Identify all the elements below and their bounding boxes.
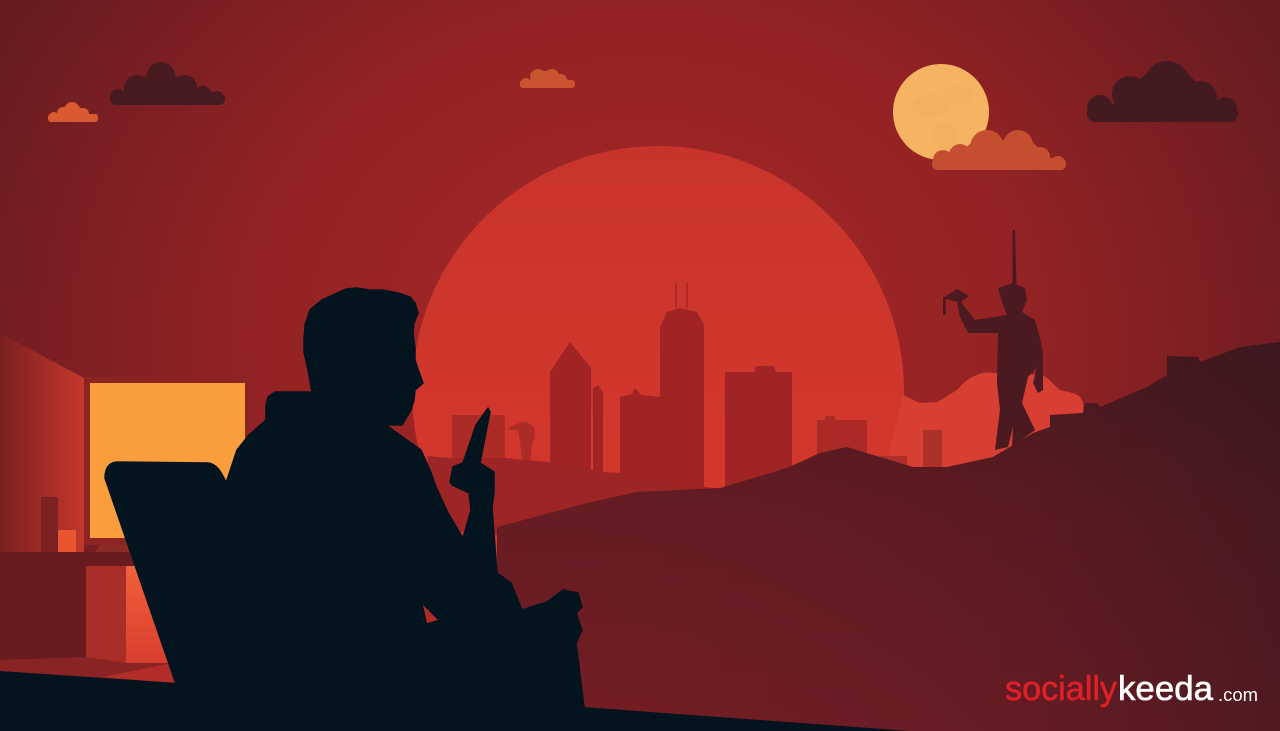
room: left wall: [0, 333, 250, 684]
pointed tower: [550, 342, 591, 480]
low block: [817, 416, 867, 460]
standing figure with cap: [943, 230, 1043, 450]
foreground hills: [497, 342, 1280, 731]
monitor frame: [84, 377, 250, 545]
skyscraper antennas: [676, 283, 687, 308]
dark cloud top left: [110, 62, 225, 105]
orange cloud top centre: [520, 69, 575, 88]
dark cloud top right: [1087, 61, 1238, 122]
mast above figure: [1012, 230, 1016, 285]
logo suffix: .com: .com: [1218, 685, 1258, 705]
faint far building: [452, 415, 505, 465]
orange cloud by moon: [932, 130, 1066, 170]
hill shading: [497, 342, 1280, 731]
chair: [105, 462, 240, 690]
body: [943, 283, 1043, 450]
logo: sociallykeeda.com: [1005, 670, 1258, 708]
gap between arm and torso: [423, 605, 438, 623]
mid-rise block: [620, 388, 660, 480]
orange cloud far left: [48, 102, 98, 122]
city foreground land: [427, 456, 725, 535]
cabinet: [86, 566, 126, 663]
tassel: [943, 297, 946, 315]
small distant figure: [508, 422, 535, 460]
city skyline: [427, 283, 942, 535]
moon craters: [912, 86, 972, 149]
logo word: socially: socially: [1005, 670, 1118, 708]
logo word: keeda: keeda: [1118, 670, 1214, 708]
cloud behind standing figure: [885, 372, 1084, 470]
dark foreground ledge: [0, 671, 910, 731]
small box: [58, 530, 76, 552]
sun disc: [412, 146, 904, 638]
seated silhouette: [105, 288, 584, 712]
desk post: [41, 497, 58, 553]
monitor stand: [95, 545, 140, 552]
person: [226, 288, 584, 712]
lit wall: [0, 333, 84, 552]
tall skyscraper: [660, 308, 704, 487]
glowing monitor screen: [90, 383, 245, 538]
back wall column: [76, 360, 100, 380]
thin tower: [593, 385, 603, 480]
wide block: [725, 366, 792, 490]
narrow far block: [923, 430, 942, 468]
moon: [893, 64, 989, 160]
floor: [0, 657, 180, 684]
desk: [0, 552, 180, 664]
